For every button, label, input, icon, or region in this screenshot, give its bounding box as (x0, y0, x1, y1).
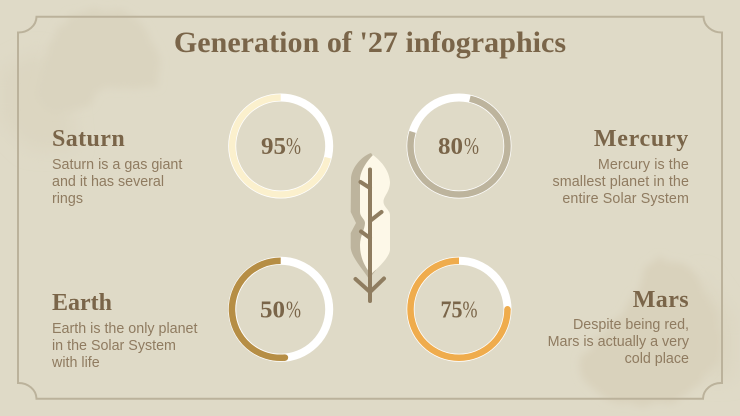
description: Mars: Despite being red, (573, 317, 689, 333)
chart: 50% donut: % (286, 298, 301, 324)
heading: Mercury: Mercury (594, 126, 689, 152)
description: Mercury: Mercury is the (598, 157, 689, 173)
description: Earth (52, 321, 198, 371)
description: Saturn: rings (52, 191, 83, 207)
watercolor stain bottom right (580, 260, 735, 407)
icon: feather (351, 153, 390, 301)
description: Mars (548, 317, 689, 367)
description: Mars: cold place (625, 351, 689, 367)
description: Earth: in the Solar System (52, 338, 176, 354)
description: Saturn (52, 157, 182, 207)
panel: Earth text (52, 290, 198, 371)
heading: Saturn: Saturn (52, 126, 125, 152)
title: Generation of '27 infographics (174, 26, 566, 59)
description: Saturn: and it has several (52, 174, 164, 190)
chart: 50% donut (232, 261, 329, 361)
description: Mars: Mars is actually a very (548, 334, 689, 350)
description: Mercury (552, 157, 689, 207)
description: Earth: with life (52, 355, 100, 371)
panel: Saturn text (52, 126, 182, 207)
heading: Mars: Mars (633, 287, 689, 313)
chart: 75% donut: % (462, 298, 478, 324)
heading: Earth: Earth (52, 290, 112, 316)
description: Mercury: entire Solar System (562, 191, 689, 207)
chart: 95% donut (232, 98, 329, 194)
chart: 50% donut: 50 (260, 298, 285, 324)
chart: 75% donut (410, 261, 511, 358)
chart: 95% donut: % (286, 134, 301, 160)
chart: 80% donut (410, 98, 508, 194)
watercolor stain top left (0, 7, 158, 150)
description: Saturn: Saturn is a gas giant (52, 157, 182, 173)
panel: Mars text (548, 287, 689, 367)
chart: 80% donut: 80 (438, 134, 463, 160)
description: Mercury: smallest planet in the (552, 174, 689, 190)
chart: 75% donut: 75 (440, 298, 462, 324)
panel: Mercury text (552, 126, 689, 207)
description: Earth: Earth is the only planet (52, 321, 197, 337)
chart: 80% donut: % (464, 134, 479, 160)
chart: 95% donut: 95 (261, 134, 286, 160)
